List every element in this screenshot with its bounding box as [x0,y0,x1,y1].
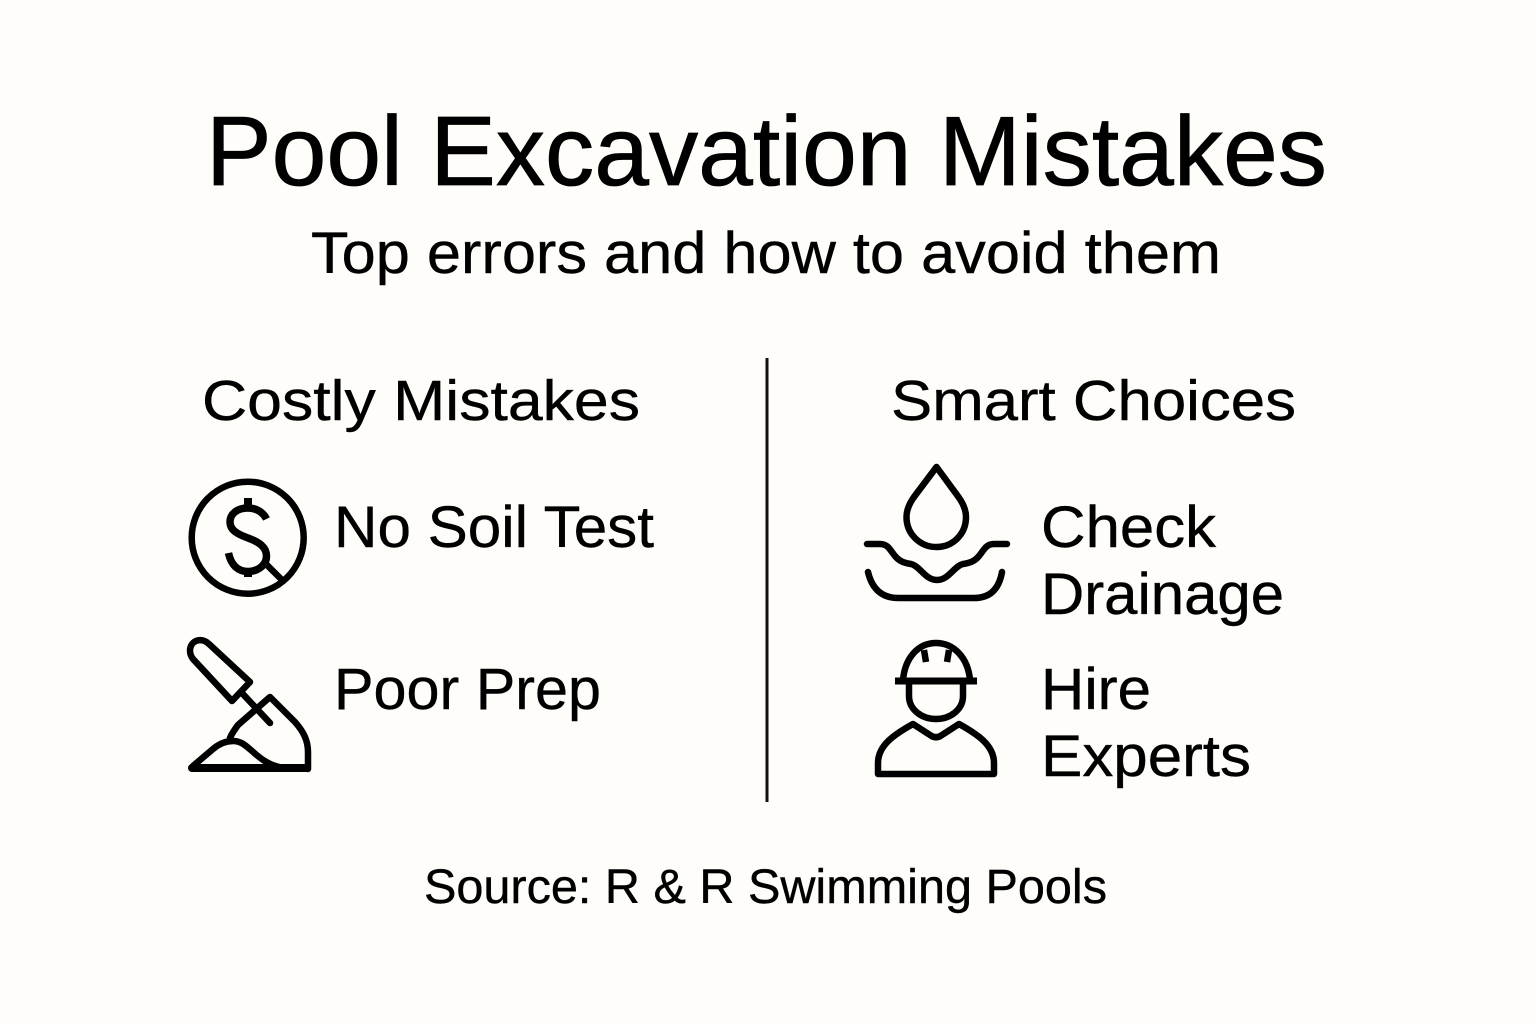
subtitle: Top errors and how to avoid them [311,221,1221,286]
divider [766,358,768,802]
label: check drainage: Check [1041,495,1217,560]
icon: worker with hard hat [878,643,994,774]
icon: trowel and soil [190,640,308,769]
label: poor prep: Poor Prep [334,657,601,722]
panel: smart choices [867,369,1296,789]
label: hire experts: Experts [1041,724,1251,789]
heading: costly mistakes: Costly Mistakes [202,369,640,433]
label: no soil test: No Soil Test [334,495,654,560]
label: check drainage: Drainage [1041,562,1284,627]
label: check drainage [1041,495,1284,627]
icon: water drop and ground [867,467,1007,598]
heading: smart choices: Smart Choices [891,369,1296,433]
icon: crossed-out dollar [192,482,304,594]
source note: Source: R & R Swimming Pools [424,861,1107,914]
title: Pool Excavation Mistakes [206,96,1327,206]
label: hire experts [1041,657,1251,789]
panel: costly mistakes [190,369,654,769]
label: hire experts: Hire [1041,657,1151,722]
